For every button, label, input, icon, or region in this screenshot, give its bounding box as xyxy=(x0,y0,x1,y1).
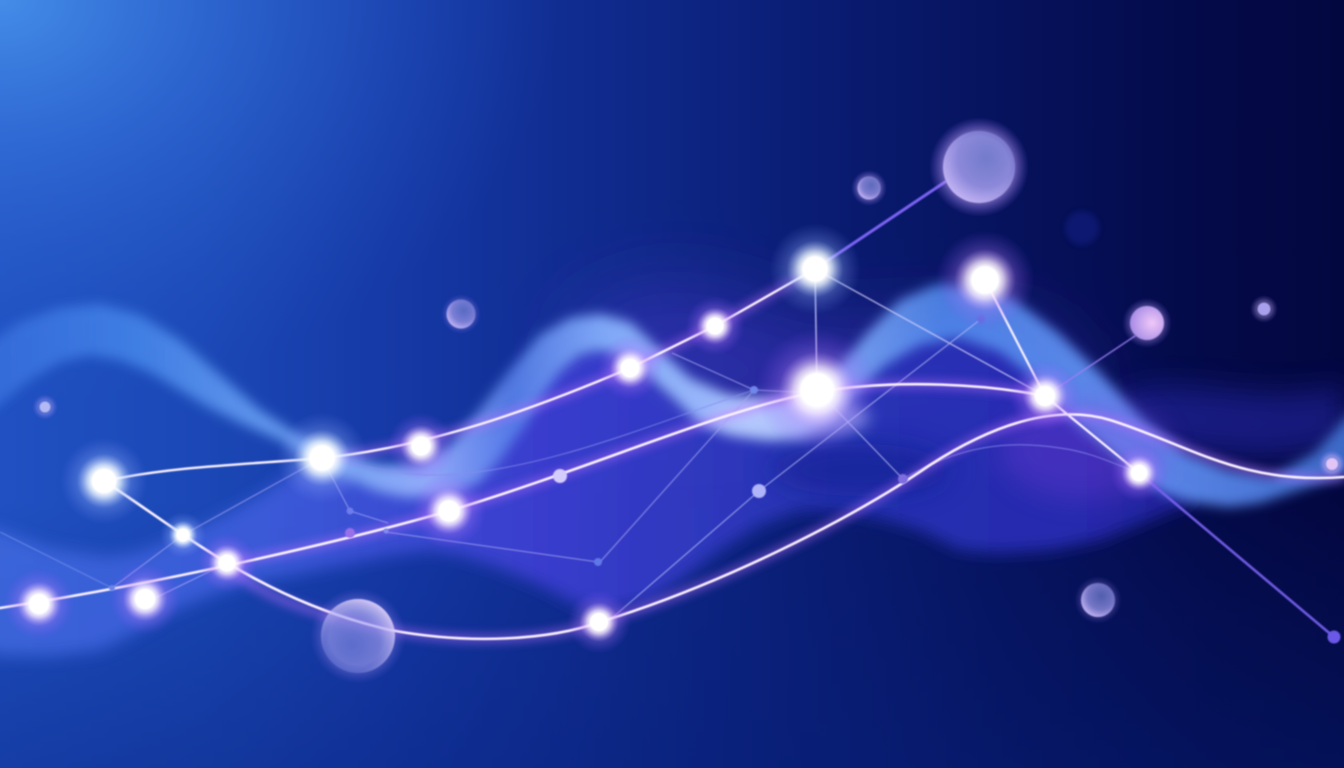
node xyxy=(3,568,75,640)
small bubble: lower right xyxy=(1074,576,1122,624)
node xyxy=(1110,444,1168,502)
translucent wave: main light blue ribbon xyxy=(0,284,1344,507)
glowing nodes xyxy=(3,223,1344,654)
node xyxy=(160,512,206,558)
node xyxy=(685,296,745,356)
curve: right descending segment xyxy=(985,280,1139,473)
thin network connections xyxy=(0,269,1139,618)
node xyxy=(387,412,455,480)
node xyxy=(60,437,148,525)
translucent wave: violet body band xyxy=(0,310,1200,656)
curve: middle path xyxy=(0,384,1045,608)
node xyxy=(109,563,181,635)
violet connector lines xyxy=(815,182,1334,637)
large bubble: top right xyxy=(929,117,1029,217)
small bubble: top xyxy=(851,170,887,206)
ribbon highlight: centre node wash xyxy=(710,398,870,438)
faint band at far right xyxy=(1120,385,1344,456)
main curves xyxy=(0,269,1344,639)
node xyxy=(1009,360,1081,432)
node xyxy=(1318,450,1344,478)
node xyxy=(197,533,257,593)
small bubble: right pink xyxy=(1122,298,1172,348)
small faint dot: far left xyxy=(32,394,58,420)
faint bubble: dark upper right xyxy=(1065,211,1099,245)
small network dots xyxy=(109,315,1340,644)
large bubble: bottom left xyxy=(310,588,406,684)
node xyxy=(755,328,879,452)
node xyxy=(276,412,368,504)
node xyxy=(769,223,861,315)
violet haze behind the peaks xyxy=(560,289,1100,440)
node xyxy=(935,230,1035,330)
node xyxy=(411,473,487,549)
small bubble: left centre xyxy=(441,294,481,334)
curve: lower path xyxy=(104,414,1344,639)
curve: upper path xyxy=(104,269,815,481)
node xyxy=(567,590,631,654)
purple glow around right junction xyxy=(1000,400,1170,500)
node xyxy=(597,335,663,401)
glow under main curves xyxy=(227,269,1344,639)
dark pocket inside body band xyxy=(770,444,950,496)
small faint dot: far right xyxy=(1250,295,1278,323)
